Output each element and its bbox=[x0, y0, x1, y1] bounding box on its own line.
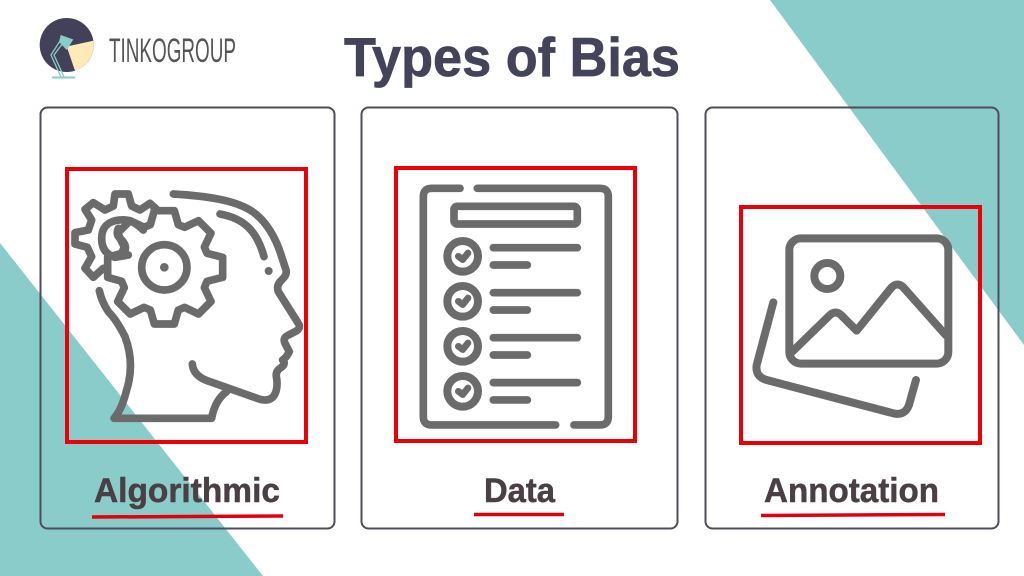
underline: data bbox=[474, 513, 564, 516]
logo text: TINKOGROUP bbox=[109, 32, 236, 70]
icon: head with gears bbox=[75, 194, 299, 418]
underline: algorithmic bbox=[92, 516, 283, 517]
label: data: Data bbox=[484, 472, 556, 510]
icon: checklist bbox=[423, 188, 608, 425]
background triangle: bottom left bbox=[0, 243, 263, 576]
red frame: algorithmic bbox=[67, 169, 306, 442]
label: annotation: Annotation bbox=[764, 472, 939, 510]
label: algorithmic: Algorithmic bbox=[94, 472, 280, 510]
underline: annotation bbox=[761, 514, 945, 516]
panel: data bbox=[362, 108, 678, 528]
red frame: data bbox=[396, 168, 635, 441]
red frame: annotation bbox=[741, 207, 980, 443]
title: Types of Bias bbox=[344, 26, 680, 88]
panel: algorithmic bbox=[40, 108, 334, 528]
logo: lamp icon bbox=[40, 18, 94, 78]
background triangle: top right bbox=[770, 0, 1024, 345]
panel: annotation bbox=[706, 108, 998, 528]
icon: images bbox=[756, 238, 948, 414]
